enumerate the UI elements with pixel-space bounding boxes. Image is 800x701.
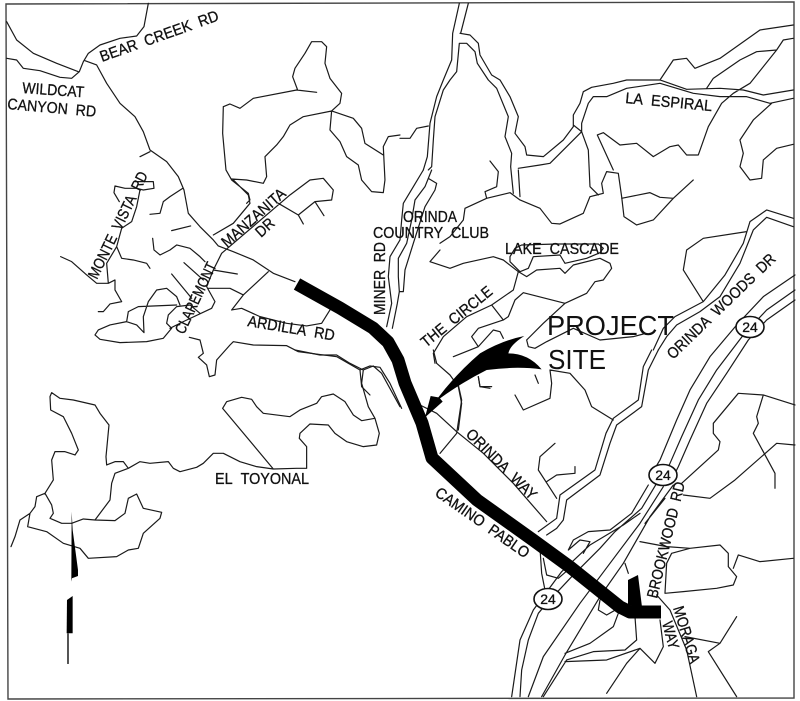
highway 24 shield: north [736,316,764,338]
road and place labels: BROOKWOOD RD [644,480,689,600]
road and place labels: CANYON RD [7,96,97,121]
road and place labels: LAKE CASCADE [505,241,619,258]
north arrow [67,512,78,664]
road and place labels: BEAR CREEK RD [98,8,221,66]
roads: Lake Cascade and The Circle area [430,244,643,363]
roads: Miner Road corridor [387,170,437,328]
project site label: SITE [548,344,606,375]
road and place labels: LA ESPIRAL [625,90,713,115]
road and place labels: COUNTRY CLUB [373,225,489,242]
road and place labels: WILDCAT [22,80,85,101]
roads: southwest area [11,350,400,558]
highway 24 shield: middle: 24 [655,467,671,483]
road and place labels: ORINDA WOODS DR [664,251,779,363]
road and place labels: MORAGA [669,604,703,666]
project site label [547,310,674,375]
road and place labels: THE CIRCLE [418,283,496,351]
road and place labels: CAMINO PABLO [432,484,532,562]
road and place labels: DR [252,215,279,241]
roads: northwest area [7,3,400,343]
road and place labels: CLAREMONT [172,259,221,337]
roads: Highway 24 south section and interchange [512,483,697,697]
roads: Highway 24 north section [650,275,795,498]
highway 24 shield: middle [649,464,677,486]
roads: center below The Circle [433,350,492,430]
road and place labels: MINER RD [372,242,389,315]
road and place labels: EL TOYONAL [215,471,309,488]
project route: thick black line [297,284,661,612]
roads: Ardilla lower road [189,337,402,408]
road and place labels: WAY [658,620,682,651]
road and place labels: MONTE VISTA RD [85,169,152,282]
roads: northeast area [400,3,793,350]
road and place labels: ORINDA WAY [462,426,540,504]
highway 24 shield: north: 24 [742,319,758,335]
road and place labels: MANZANITA [218,185,290,251]
roads: southeast area [420,350,793,697]
arrow pointing from project site label to route [425,336,542,417]
road and place labels: ARDILLA RD [246,313,336,344]
road and place labels: ORINDA [403,209,458,226]
highway 24 shield: south [534,588,562,610]
highway 24 shield: south: 24 [540,591,556,607]
project site label: PROJECT [547,310,674,341]
